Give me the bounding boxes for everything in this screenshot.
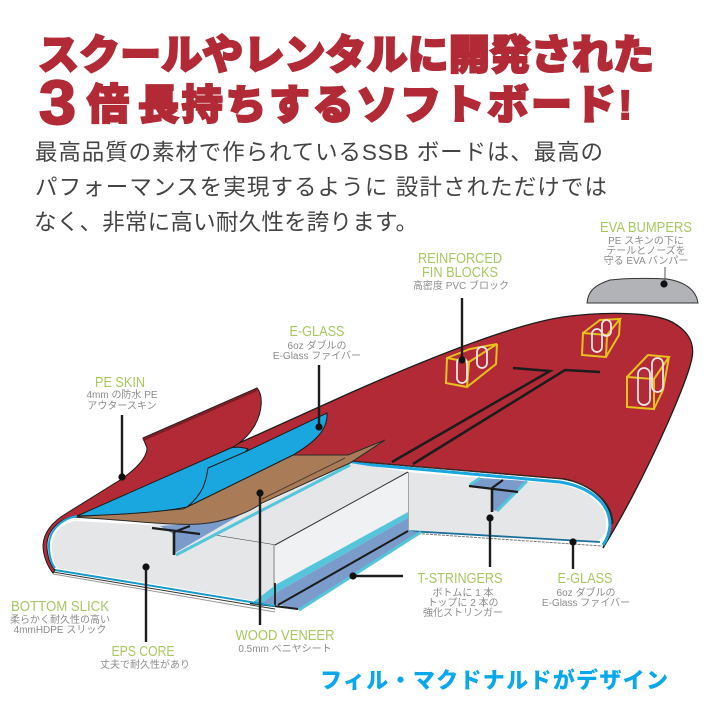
core top surface xyxy=(150,463,408,545)
label: lower E-glass xyxy=(542,571,630,609)
right core section xyxy=(350,461,613,546)
label: EVA bumpers: PE スキンの下に xyxy=(608,235,684,247)
label: EVA bumpers: テールとノーズを xyxy=(606,244,686,257)
label: EVA bumpers: 守る EVA バンパー xyxy=(604,255,688,267)
title: 3 xyxy=(39,69,76,138)
label: top E-glass: 6oz ダブルの xyxy=(288,339,346,352)
label: bottom slick: 4mmHDPE スリック xyxy=(14,624,106,636)
title xyxy=(38,32,654,138)
label: bottom slick: BOTTOM SLICK xyxy=(11,599,109,615)
label: T-stringers: T-STRINGERS xyxy=(418,571,502,587)
title: スクールやレンタルに開発された xyxy=(38,32,654,78)
label: top E-glass: E-GLASS xyxy=(290,324,344,340)
label: reinforced fin blocks: REINFORCED xyxy=(418,251,502,267)
fin block 3 xyxy=(627,355,669,409)
label: bottom slick xyxy=(10,599,110,636)
core side face xyxy=(275,472,408,603)
intro text: なく、非常に高い耐久性を誇ります。 xyxy=(34,210,418,235)
label: top E-glass: E-Glass ファイバー xyxy=(273,350,361,362)
footer credit: フィル・マクドナルドがデザイン xyxy=(320,668,668,693)
board top deck xyxy=(228,313,693,548)
intro text: 最高品質の素材で作られているSSB ボードは、最高の xyxy=(35,140,603,165)
label: EVA bumpers xyxy=(600,220,692,267)
core front face xyxy=(52,521,275,604)
label: wood veneer: 0.5mm ベニヤシート xyxy=(238,643,332,655)
leader lines xyxy=(118,267,668,642)
label: bottom slick: 柔らかく耐久性の高い xyxy=(10,613,110,626)
label: T-stringers: ボトムに 1 本 xyxy=(432,586,494,599)
label: lower E-glass: E-GLASS xyxy=(558,571,612,587)
surfboard cutaway diagram xyxy=(43,278,698,612)
intro text: パフォーマンスを実現するように 設計されただけでは xyxy=(35,175,607,200)
blue fibreglass layer xyxy=(75,413,327,516)
label: EPS core xyxy=(100,644,190,671)
label: PE skin: アウタースキン xyxy=(87,400,157,412)
right T-stringer xyxy=(469,478,527,512)
label: lower E-glass: E-Glass ファイバー xyxy=(542,597,630,609)
bottom stringer strips xyxy=(250,512,421,610)
label: reinforced fin blocks: FIN BLOCKS xyxy=(422,265,498,281)
deck stringer lines xyxy=(392,368,600,464)
label: wood veneer: WOOD VENEER xyxy=(236,628,334,644)
title: 長持ちするソフトボード! xyxy=(138,82,632,128)
label: reinforced fin blocks xyxy=(413,251,509,292)
peeled PE skin flap xyxy=(43,388,261,573)
label: PE skin: 4mm の防水 PE xyxy=(86,388,158,401)
label: T-stringers xyxy=(418,571,503,619)
wood veneer layer xyxy=(70,440,385,524)
label: PE skin: PE SKIN xyxy=(95,375,145,391)
label: PE skin xyxy=(86,375,158,412)
fin block 1 xyxy=(446,344,497,387)
bottom skin layers xyxy=(53,570,275,612)
label: EVA bumpers: EVA BUMPERS xyxy=(600,220,692,236)
label: T-stringers: 強化ストリンガー xyxy=(423,606,503,619)
EVA bumper xyxy=(587,278,698,303)
top stringer slot xyxy=(152,465,350,555)
intro text xyxy=(34,140,607,235)
label: EPS core: 丈夫で耐久性があり xyxy=(100,658,190,671)
label: top E-glass xyxy=(273,324,361,362)
label: wood veneer xyxy=(236,628,334,655)
title: 倍 xyxy=(87,81,129,128)
fin block 2 xyxy=(582,319,620,357)
label: lower E-glass: 6oz ダブルの xyxy=(557,586,615,599)
label: reinforced fin blocks: 高密度 PVC ブロック xyxy=(413,279,509,292)
label: EPS core: EPS CORE xyxy=(112,644,175,660)
label: T-stringers: トップに 2 本の xyxy=(427,596,499,609)
